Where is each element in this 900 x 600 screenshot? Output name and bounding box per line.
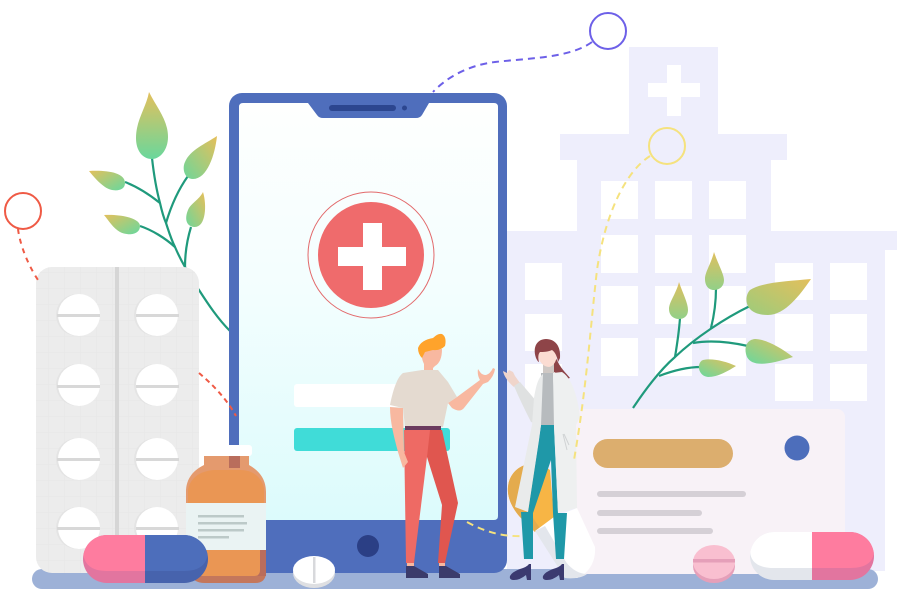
man left arm [390,407,408,468]
card text lines [597,491,746,534]
phone speaker [329,105,396,111]
doctor coat left panel [515,374,543,512]
man ankles [407,563,445,567]
bottle right shade [258,548,266,576]
teal button [294,428,450,451]
man shoes [406,566,460,578]
yellow and white capsule behind doctor [508,464,595,578]
doctor hand [503,370,520,387]
character: doctor [503,339,580,580]
bottle base [190,500,266,583]
bottle neck mark [229,456,240,468]
tablet: pink [693,545,735,583]
man right arm [448,368,495,410]
doctor face [538,348,557,367]
medical card [575,409,845,574]
blister pack [36,267,199,573]
phone home button [357,535,379,557]
plant: left branch [89,92,230,331]
hospital cross [648,65,700,116]
hospital building [507,47,897,571]
bottle label [186,503,266,550]
doctor ponytail [548,358,570,379]
white input field [294,384,404,407]
man hair [418,334,446,358]
bottle shoulder [188,470,264,503]
plant: right branch [633,252,811,408]
man head [422,349,442,374]
doctor left sleeve [514,382,538,424]
character: man [390,334,495,578]
capsule: pink and blue [83,535,208,583]
dashed connector: yellow [467,128,685,536]
doctor hair [535,339,560,362]
medicine bottle [186,445,266,583]
doctor neck [543,362,554,376]
medical cross badge [308,192,434,318]
bottle lower body [186,548,260,576]
dashed connector: purple [433,13,626,92]
bottle cap [200,445,252,456]
capsule: white and pink [750,532,874,580]
phone screen [239,103,498,520]
man shirt [390,370,457,427]
phone [229,93,507,573]
blister tablets [56,294,179,549]
hospital windows [525,181,867,401]
card title pill [593,439,733,468]
doctor coat right panel [553,372,580,513]
doctor trousers [521,425,567,559]
phone camera [402,106,407,110]
ground strip [32,569,878,589]
dashed connector: red [5,193,236,416]
bottle upper body [186,456,266,503]
tablet: white on floor [293,556,335,588]
card dot [784,436,810,460]
man belt [405,426,441,430]
doctor shirt [541,373,555,426]
doctor shoes [510,564,564,580]
man trousers [425,430,458,563]
